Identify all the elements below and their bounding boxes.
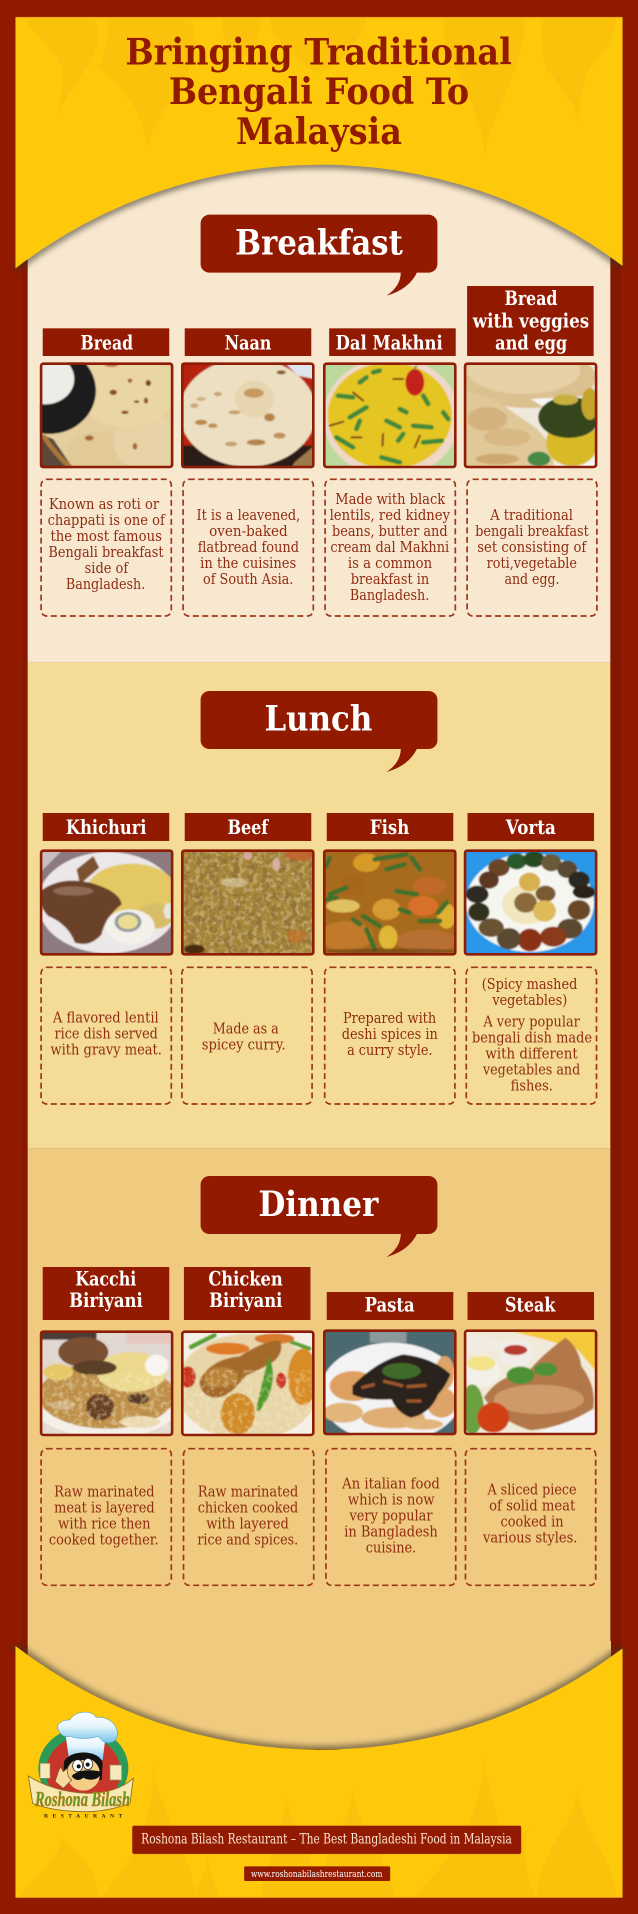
speech bubble: Lunch [201,691,437,772]
description box: A traditional [490,507,573,524]
description box: bengali dish made [472,1029,592,1046]
description box: lentils, red kidney [330,507,451,524]
description box: vegetables) [492,992,567,1009]
item: Bread with veggies and egg [459,286,600,616]
description box: (Spicy mashed [482,976,577,993]
description box: Bengali breakfast [48,544,164,561]
description box [467,479,597,616]
banner: website URL [244,1866,390,1881]
description box: fishes. [511,1077,553,1094]
item: Kacchi Biriyani: Kacchi [75,1268,136,1291]
speech bubble: Breakfast: Breakfast [235,223,403,263]
description box: a curry style. [347,1042,433,1059]
panel: breakfast [28,164,610,663]
item: Bread: Bread [81,331,133,355]
title: Bringing Traditional [125,30,512,73]
photo: chicken biriyani [176,1330,320,1440]
logo: Roshona Bilash chef [28,1712,133,1820]
item: Vorta [464,813,597,1104]
description box: beans, butter and [332,523,448,540]
banner: website URL: www.roshonabilashrestaurant.com [251,1870,383,1880]
description box: rice dish served [55,1025,158,1042]
description box: Prepared with [343,1010,437,1027]
description box: and egg. [505,571,559,588]
photo: naan [179,358,316,468]
item: Steak [461,1292,597,1585]
description box [326,1449,456,1585]
description box: in the cuisines [200,555,296,572]
title: Malaysia [236,110,402,153]
description box [41,1449,171,1585]
item: Chicken Biriyani: Chicken [208,1268,283,1291]
description box: meat is layered [54,1499,155,1516]
item: Pasta: Pasta [365,1293,415,1317]
description box: vegetables and [482,1061,580,1078]
description box: Raw marinated [198,1483,298,1500]
description box: in Bangladesh [344,1523,438,1540]
description box [325,967,455,1104]
photo: bread rotis [40,362,174,468]
description box: flatbread found [198,539,299,556]
description box: A sliced piece [487,1481,577,1498]
description box: rice and spices. [197,1531,298,1548]
description box: Known as roti or [49,496,159,513]
description box: Bangladesh. [66,576,145,593]
item: Dal Makhni: Dal Makhni [336,331,443,355]
description box: Made with black [335,491,446,508]
photo: dal makhni [323,362,456,468]
description box: oven-baked [209,523,288,540]
item: Kacchi Biriyani [35,1267,178,1585]
logo: Roshona Bilash chef: RESTAURANT [44,1814,123,1820]
description box: cream dal Makhni [330,539,449,556]
description box [325,479,455,616]
description box: It is a leavened, [197,507,300,524]
panel: lunch [28,663,610,1149]
description box: Bangladesh. [350,587,429,604]
description box [41,967,171,1104]
item: Chicken Biriyani: Biriyani [209,1289,282,1312]
footer: yellow band [15,1646,623,1897]
description box: A flavored lentil [52,1009,159,1026]
description box: A very popular [483,1013,580,1030]
banner: restaurant tagline [132,1826,521,1854]
item: Fish [320,813,457,1104]
description box: Made as a [213,1020,279,1037]
description box: deshi spices in [342,1026,438,1043]
description box [465,1449,596,1585]
description box: chappati is one of [48,512,166,529]
flames decoration [24,18,616,153]
description box: roti,vegetable [487,555,577,572]
description box [182,967,312,1104]
description box: with gravy meat. [50,1041,162,1058]
description box: cuisine. [366,1539,416,1556]
flames decoration [20,1758,617,1897]
item: Kacchi Biriyani: Biriyani [69,1289,143,1312]
photo: khichuri [38,849,179,955]
item: Chicken Biriyani [176,1267,320,1585]
item: Naan [179,328,316,616]
description box [183,479,313,616]
description box: An italian food [341,1475,440,1492]
item: Bread with veggies and egg: with veggies [472,309,589,333]
item: Bread with veggies and egg: Bread [505,287,558,310]
speech bubble: Lunch: Lunch [264,699,372,740]
description box: side of [85,560,130,577]
item: Khichuri [38,813,179,1104]
photo: vorta plate [464,849,597,955]
description box: of solid meat [489,1497,576,1514]
description box: chicken cooked [198,1499,298,1516]
description box: with different [485,1045,578,1062]
panel: dinner [28,1149,610,1749]
description box: which is now [348,1491,435,1508]
photo: fish curry [320,849,457,955]
item: Dal Makhni [323,328,460,616]
photo: grilled meat with pasta [323,1329,456,1436]
item: Beef: Beef [227,816,269,839]
description box: Raw marinated [54,1483,155,1500]
item: Bread [40,328,174,617]
photo: bread with vegetables [464,362,598,468]
item: Pasta [320,1292,463,1585]
description box: the most famous [50,528,162,545]
description box [41,479,171,616]
item: Naan: Naan [225,331,271,355]
photo: kacchi biriyani [35,1330,178,1438]
top banner: yellow arch with title [15,17,623,268]
description box [184,1449,314,1585]
description box: with layered [206,1515,289,1532]
speech bubble: Dinner [201,1176,437,1257]
description box: of South Asia. [203,571,293,588]
item: Steak: Steak [505,1293,556,1317]
description box: cooked together. [49,1531,159,1548]
description box: with rice then [58,1515,151,1532]
logo: Roshona Bilash chef: Roshona Bilash [34,1787,130,1811]
item: Khichuri: Khichuri [66,816,146,839]
description box [466,967,596,1104]
photo: steak [461,1329,597,1435]
description box: breakfast in [351,571,430,588]
description box: very popular [349,1507,433,1524]
speech bubble: Dinner: Dinner [258,1185,379,1225]
item: Vorta: Vorta [505,816,556,839]
speech bubble: Breakfast [201,215,437,296]
photo: beef curry [181,848,318,955]
title [125,30,512,153]
item: Bread with veggies and egg: and egg [495,332,567,355]
item: Beef [181,813,318,1104]
title: Bengali Food To [169,70,469,113]
item: Fish: Fish [370,816,409,839]
description box: cooked in [500,1513,564,1530]
description box: is a common [348,555,432,572]
description box: bengali breakfast [475,523,589,540]
description box: set consisting of [477,539,588,556]
description box: various styles. [482,1529,577,1546]
description box: spicey curry. [202,1036,286,1053]
